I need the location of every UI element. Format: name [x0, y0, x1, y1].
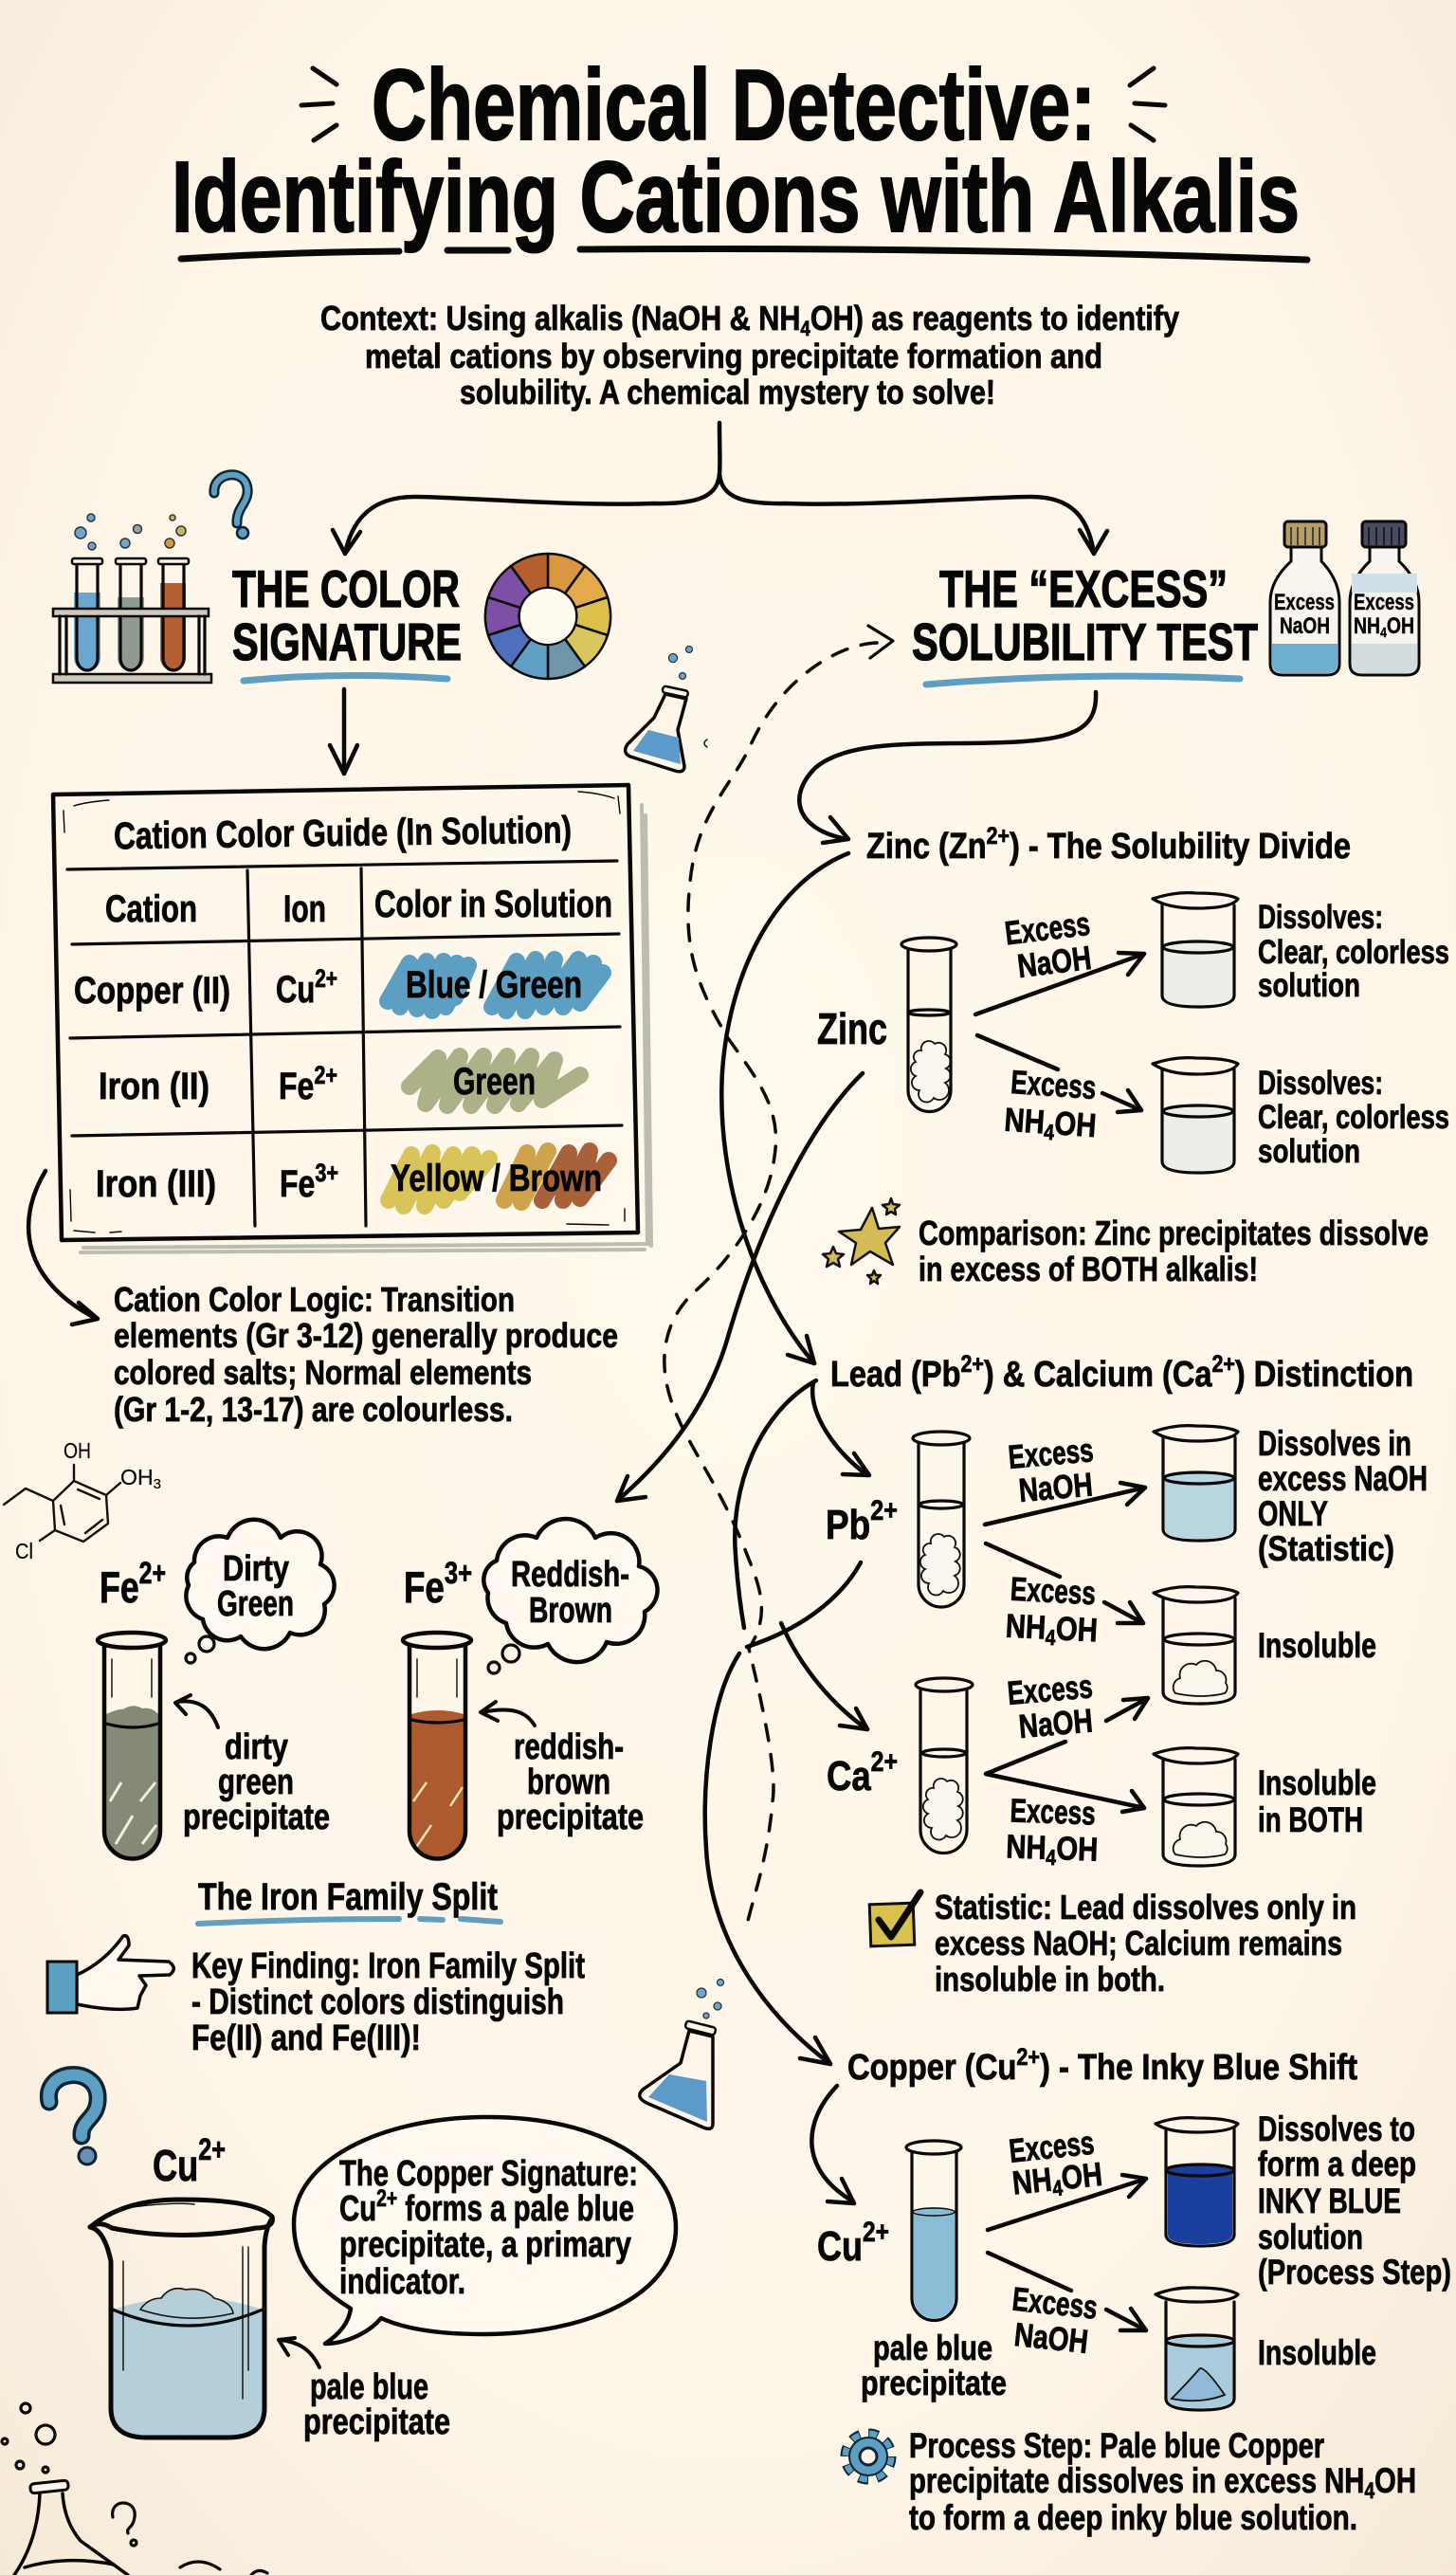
beaker insoluble — [1154, 1587, 1238, 1704]
icon: gear — [846, 2434, 891, 2479]
text dissolves inky blue: INKY BLUE — [1258, 2182, 1401, 2220]
label Fe2+: 2+ — [139, 1556, 166, 1590]
heading: excess solubility test: SOLUBILITY TEST — [912, 612, 1258, 671]
arrow: test to zinc — [799, 692, 1096, 843]
icon: bottle excess NH4OH: NH — [1354, 613, 1387, 639]
text dissolves inky blue: form a deep — [1258, 2145, 1416, 2183]
label excess NaOH: NaOH — [1017, 1702, 1094, 1745]
label reddish brown precipitate: precipitate — [497, 1798, 644, 1837]
text insoluble in both — [1258, 1763, 1376, 1839]
icon: flask in middle lower — [640, 1980, 724, 2128]
arrow to beaker — [279, 2338, 319, 2367]
text insoluble in both: in BOTH — [1258, 1800, 1363, 1839]
icon: test tube rack — [53, 514, 211, 683]
title — [172, 49, 1307, 260]
icon: molecule diagram — [4, 1438, 161, 1563]
thought cloud: dirty green — [186, 1520, 335, 1663]
label excess NH4OH: OH — [1055, 1610, 1099, 1650]
row: iron II: Iron (II) — [99, 1066, 209, 1107]
text: process step: to form a deep inky blue solution. — [909, 2498, 1357, 2537]
panel: copper tests — [817, 2109, 1451, 2410]
speech bubble: copper signature: 2+ — [376, 2185, 397, 2212]
thought cloud: dirty green: Dirty — [223, 1549, 289, 1589]
label excess NH4OH: NH — [1003, 1102, 1053, 1141]
icon: bottle excess NaOH — [1270, 521, 1339, 675]
text insoluble: Insoluble — [1258, 2333, 1376, 2372]
arrow Pb to NaOH — [985, 1483, 1145, 1525]
heading: the iron family split: The Iron Family Split — [198, 1876, 498, 1918]
label excess NH4OH: 4 — [1043, 1119, 1055, 1144]
label excess NaOH — [1006, 1668, 1097, 1746]
arrow copper to NH4OH — [988, 2175, 1146, 2230]
row: copper: 2+ — [315, 964, 337, 993]
column headers: Cation — [105, 888, 197, 930]
text: cation color logic: elements (Gr 3-12) generally produce — [114, 1316, 618, 1355]
row: iron II — [99, 1056, 580, 1107]
context text block: solubility. A chemical mystery to solve! — [460, 373, 995, 411]
icon: check box — [869, 1892, 920, 1946]
arrow: table to color logic — [28, 1171, 98, 1324]
text: process step — [909, 2426, 1416, 2537]
label excess NH4OH: NH — [1005, 1607, 1055, 1647]
label dirty green precipitate — [183, 1727, 330, 1837]
label excess NaOH: NaOH — [1012, 2316, 1090, 2361]
label excess NH4OH: NH — [1006, 1828, 1055, 1867]
label excess NaOH — [1003, 905, 1096, 986]
table title: Cation Color Guide (In Solution) — [114, 810, 572, 857]
arrow: Pb to Ca — [747, 1562, 867, 1729]
row: copper — [74, 959, 603, 1012]
label excess NaOH: Excess — [1010, 2281, 1100, 2327]
row: iron II: Green — [453, 1061, 536, 1103]
text: cation color logic: Cation Color Logic: Transition — [114, 1280, 515, 1319]
beaker blue dissolves — [1154, 1426, 1238, 1541]
label Cu2+: 2+ — [198, 2132, 226, 2166]
text: process step: 4 — [1364, 2478, 1375, 2504]
label excess NH4OH: Excess — [1010, 1064, 1098, 1106]
icon: molecule diagram: OH — [120, 1465, 154, 1489]
icon: color wheel — [485, 554, 610, 679]
text: process step: OH — [1374, 2461, 1416, 2500]
heading: zinc: 2+ — [987, 823, 1010, 849]
icon: bottle excess NaOH: NaOH — [1280, 613, 1330, 639]
heading: lead and calcium: Lead (Pb — [830, 1355, 982, 1395]
speech bubble: copper signature: forms a pale blue — [397, 2189, 634, 2229]
label excess NH4OH: Excess — [1010, 1792, 1096, 1833]
label pale blue precipitate — [861, 2328, 1007, 2402]
heading: the color signature: THE COLOR — [232, 559, 460, 618]
speech bubble: copper signature: Cu — [339, 2189, 388, 2229]
column headers: Ion — [283, 888, 326, 930]
text dissolves 1: solution — [1258, 967, 1360, 1004]
arrow: lead to Pb tube — [812, 1382, 869, 1475]
panel: lead tests — [826, 1424, 1428, 1704]
test tube dirty green precipitate — [98, 1633, 166, 1858]
heading: the color signature — [232, 559, 462, 681]
arrow: context branches to both sections — [333, 423, 1107, 554]
label reddish brown precipitate: reddish- — [514, 1727, 624, 1767]
label excess NaOH — [1007, 2281, 1100, 2362]
label excess NH4OH — [1003, 1064, 1101, 1147]
row: copper: Blue / Green — [406, 964, 582, 1006]
label pale blue precipitate: pale blue — [310, 2367, 428, 2407]
label reddish brown precipitate: brown — [527, 1762, 610, 1802]
icon: stars — [823, 1198, 900, 1284]
text: comparison — [919, 1214, 1429, 1288]
panel: calcium tests — [827, 1668, 1376, 1872]
label pale blue precipitate: precipitate — [861, 2364, 1007, 2402]
label excess NH4OH: Excess — [1010, 1571, 1097, 1612]
panel: iron Fe2+ — [98, 1520, 335, 1858]
label excess NH4OH — [1008, 2124, 1104, 2205]
icon: molecule diagram: 3 — [154, 1476, 161, 1492]
text: cation color logic: colored salts; Normal elements — [114, 1353, 532, 1392]
label excess NH4OH: Excess — [1008, 2125, 1096, 2170]
label excess NH4OH — [1005, 1571, 1101, 1653]
dashed connector arrow — [664, 626, 893, 1925]
text dissolves inky blue: solution — [1258, 2218, 1363, 2256]
panel: cation color guide table — [53, 785, 651, 1252]
heading: copper: 2+ — [1016, 2044, 1040, 2071]
heading: copper: ) - The Inky Blue Shift — [1040, 2048, 1357, 2088]
arrow: color signature down to table — [330, 689, 357, 774]
arrow to reddish brown tube — [481, 1702, 535, 1726]
text dissolves in excess NaOH only — [1258, 1424, 1428, 1568]
icon: pointing hand — [47, 1936, 173, 2013]
panel: copper signature — [90, 2117, 676, 2442]
context text block: metal cations by observing precipitate formation and — [365, 337, 1102, 375]
text dissolves 1 — [1258, 899, 1449, 1004]
text insoluble: Insoluble — [1258, 1626, 1376, 1665]
heading: lead and calcium: ) & Calcium (Ca — [984, 1355, 1212, 1395]
label excess NH4OH: 4 — [1045, 1625, 1056, 1650]
label Pb2+: 2+ — [870, 1495, 898, 1526]
row: iron III: Fe — [280, 1163, 324, 1205]
title: Chemical Detective: — [372, 49, 1096, 161]
beaker clear 1 — [1153, 893, 1238, 1007]
heading: zinc: ) - The Solubility Divide — [1010, 827, 1351, 867]
label excess NH4OH: 4 — [1046, 1845, 1057, 1870]
arrow: lead loop — [735, 1380, 816, 1628]
arrow: zinc to iron family — [617, 1073, 863, 1501]
label excess NaOH — [1007, 1432, 1098, 1510]
icon: bottle excess NH4OH — [1350, 521, 1419, 675]
arrow Ca branches — [986, 1698, 1148, 1812]
panel: iron Fe3+ — [403, 1519, 658, 1858]
beaker insoluble both — [1154, 1748, 1238, 1866]
panel: zinc tests — [817, 893, 1449, 1173]
text: statistic — [935, 1888, 1356, 1999]
row: copper: Cu — [276, 969, 326, 1011]
text: key finding: Fe(II) and Fe(III)! — [191, 2018, 421, 2058]
beaker with pale blue precipitate — [90, 2200, 272, 2438]
speech bubble: copper signature: indicator. — [339, 2262, 465, 2302]
icon: question mark blue — [214, 475, 248, 539]
beaker clear 2 — [1153, 1058, 1238, 1173]
label Fe3+: Fe — [404, 1562, 455, 1612]
text: comparison: in excess of BOTH alkalis! — [919, 1250, 1258, 1288]
icon: flask and bubbles bottom left — [2, 2403, 267, 2575]
icon: bottle excess NH4OH: OH — [1387, 613, 1414, 639]
text: cation color logic — [114, 1280, 618, 1429]
heading: lead and calcium: 2+ — [1211, 1351, 1235, 1378]
context text block: Context: Using alkalis (NaOH & NH — [320, 299, 885, 338]
row: iron II: 2+ — [314, 1061, 337, 1089]
heading: lead and calcium: ) Distinction — [1235, 1355, 1413, 1395]
text dissolves 1: Dissolves: — [1258, 899, 1383, 936]
table frame and grid — [53, 785, 638, 1240]
text dissolves 2: Dissolves: — [1258, 1065, 1383, 1102]
text: process step: Process Step: Pale blue Copper — [909, 2426, 1324, 2465]
label Ca2+: Ca — [827, 1753, 880, 1799]
icon: bottle excess NH4OH: Excess — [1354, 590, 1414, 615]
text: statistic: insoluble in both. — [935, 1960, 1165, 1999]
arrow excess NaOH — [975, 953, 1144, 1014]
icon: bottle excess NH4OH: 4 — [1380, 625, 1387, 641]
heading: excess solubility test — [912, 559, 1258, 685]
label dirty green precipitate: precipitate — [183, 1798, 330, 1837]
test tube reddish brown precipitate — [403, 1633, 471, 1858]
label excess NaOH: NaOH — [1015, 940, 1093, 985]
beaker insoluble copper — [1156, 2288, 1238, 2410]
context text block: OH) as reagents to identify — [810, 299, 1179, 338]
arrow copper to NaOH — [988, 2253, 1146, 2330]
heading: copper: Copper (Cu — [847, 2048, 1044, 2088]
label excess NaOH: Excess — [1006, 1668, 1094, 1712]
label Fe2+: Fe — [100, 1562, 151, 1612]
context text block — [320, 299, 1179, 411]
label pale blue precipitate: pale blue — [873, 2328, 992, 2367]
arrow: copper heading to tube — [811, 2086, 854, 2203]
row: iron II: Fe — [279, 1066, 323, 1107]
row: iron III: Iron (III) — [96, 1163, 216, 1205]
label excess NH4OH: OH — [1053, 1105, 1098, 1144]
label reddish brown precipitate — [497, 1727, 644, 1837]
label excess NH4OH: 4 — [1051, 2175, 1064, 2201]
text dissolves inky blue — [1258, 2109, 1451, 2292]
arrow Pb to NH4OH — [986, 1543, 1143, 1623]
label excess NaOH: Excess — [1007, 1432, 1095, 1476]
text dissolves in excess NaOH only: (Statistic) — [1258, 1529, 1394, 1568]
text dissolves 2: solution — [1258, 1133, 1360, 1170]
thought cloud: reddish brown — [483, 1519, 658, 1673]
icon: molecule diagram: OH — [64, 1438, 91, 1463]
speech bubble: copper signature: precipitate, a primary — [339, 2225, 631, 2265]
label Pb2+: Pb — [826, 1502, 879, 1548]
text: key finding — [191, 1946, 585, 2058]
text: key finding: Key Finding: Iron Family Split — [191, 1946, 585, 1986]
text: statistic: excess NaOH; Calcium remains — [935, 1924, 1342, 1963]
arrow to dirty green tube — [175, 1695, 218, 1727]
label dirty green precipitate: dirty — [225, 1727, 288, 1767]
row: iron III: 3+ — [315, 1159, 338, 1187]
label excess NaOH: NaOH — [1017, 1466, 1094, 1509]
arrow: lead section to copper — [705, 1653, 830, 2064]
label excess NH4OH: OH — [1060, 2156, 1104, 2197]
label dirty green precipitate: green — [218, 1762, 294, 1802]
thought cloud: reddish brown: Reddish- — [511, 1555, 629, 1595]
label Ca2+: 2+ — [871, 1746, 898, 1778]
label Cu2+: Cu — [817, 2223, 873, 2270]
icon: molecule diagram: Cl — [15, 1539, 33, 1563]
thought cloud: dirty green: Green — [217, 1584, 294, 1624]
row: copper: Copper (II) — [74, 970, 230, 1012]
heading: lead and calcium: 2+ — [960, 1351, 984, 1378]
column headers: Color in Solution — [374, 884, 612, 925]
text: statistic: Statistic: Lead dissolves only in — [935, 1888, 1356, 1927]
label zinc: Zinc — [817, 1004, 887, 1053]
column headers — [105, 884, 612, 930]
heading: zinc: Zinc (Zn — [866, 827, 1007, 867]
icon: bottle excess NaOH: Excess — [1274, 590, 1335, 615]
label excess NH4OH — [1006, 1792, 1100, 1872]
test tube zinc — [901, 938, 956, 1111]
test tube Ca — [916, 1678, 973, 1853]
label pale blue precipitate: precipitate — [303, 2402, 450, 2442]
test tube Pb — [913, 1432, 970, 1607]
label pale blue precipitate — [303, 2367, 450, 2442]
speech bubble: copper signature — [294, 2117, 676, 2344]
test tube copper — [906, 2141, 961, 2321]
label Cu2+: 2+ — [863, 2217, 889, 2248]
speech bubble: copper signature: The Copper Signature: — [339, 2154, 638, 2194]
heading: the color signature: SIGNATURE — [232, 612, 462, 671]
thought cloud: reddish brown: Brown — [529, 1591, 612, 1631]
text: cation color logic: (Gr 1-2, 13-17) are colourless. — [114, 1390, 513, 1429]
table sketch shadow — [81, 805, 651, 1252]
label Cu2+: Cu — [153, 2141, 210, 2190]
label excess NH4OH: OH — [1056, 1830, 1099, 1869]
text dissolves in excess NaOH only: ONLY — [1258, 1494, 1328, 1533]
heading: excess solubility test: THE “EXCESS” — [939, 559, 1228, 618]
icon: flask upper — [626, 647, 707, 772]
label excess NaOH: Excess — [1003, 905, 1092, 952]
icon: question mark lower left — [48, 2075, 98, 2164]
text insoluble in both: Insoluble — [1258, 1763, 1376, 1802]
label Fe3+: 3+ — [445, 1556, 472, 1590]
text: key finding: - Distinct colors distinguish — [191, 1982, 564, 2022]
row: iron III — [96, 1151, 609, 1206]
text dissolves 2 — [1258, 1065, 1449, 1170]
arrow: zinc to lead — [721, 853, 848, 1363]
beaker inky blue — [1156, 2118, 1238, 2246]
context text block: 4 — [800, 317, 810, 340]
arrow excess NH4OH — [977, 1035, 1141, 1112]
label excess NH4OH: NH — [1010, 2161, 1063, 2202]
row: iron III: Yellow / Brown — [391, 1158, 602, 1199]
